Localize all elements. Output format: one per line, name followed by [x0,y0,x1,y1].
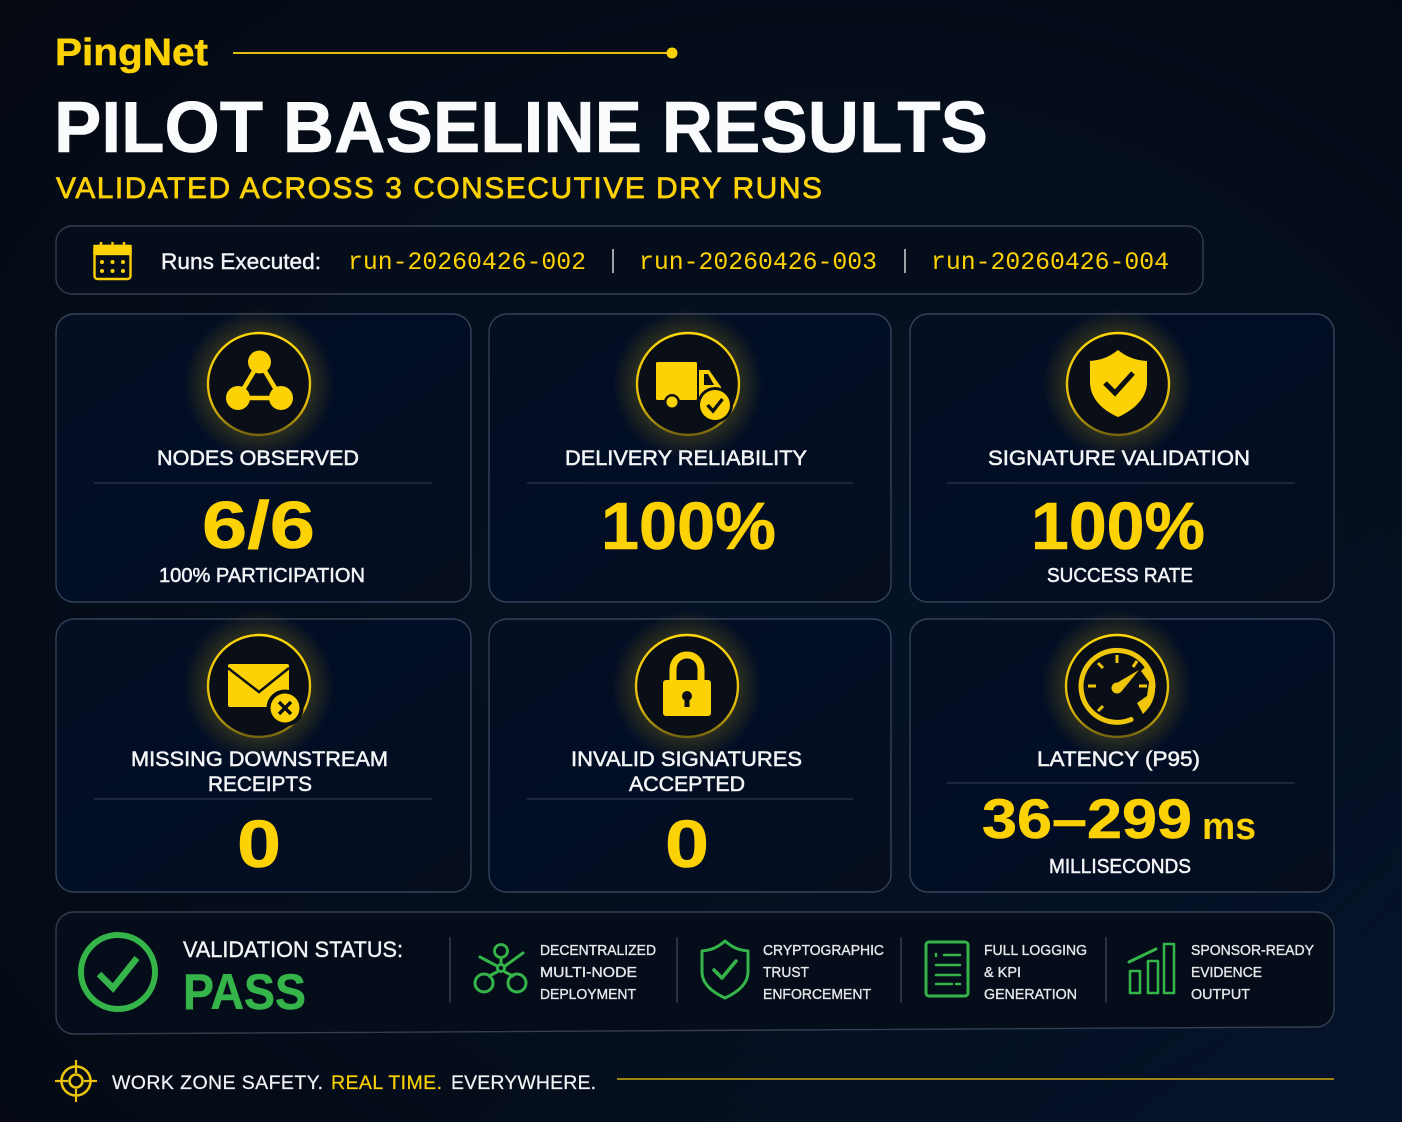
icon: truck with check [637,333,739,435]
value: 100% [1031,489,1205,564]
feature: cryptographic trust [702,941,884,1003]
feature: decentralized deployment: DEPLOYMENT [540,987,636,1003]
panel: validation status [56,912,1334,1034]
icon: pass check [81,935,155,1009]
feature: full logging: & KPI [984,965,1021,981]
caption: MILLISECONDS [1049,856,1191,878]
run identifiers [348,248,1169,277]
feature: sponsor-ready evidence: OUTPUT [1191,987,1250,1003]
feature: decentralized deployment: MULTI-NODE [540,965,637,981]
header: brand logo with line [55,32,678,74]
footer tagline: REAL TIME. [331,1072,442,1094]
panel: invalid signatures accepted [489,611,891,892]
label: INVALID SIGNATURES [571,747,802,771]
icon: target [55,1060,97,1102]
caption: 100% PARTICIPATION [159,565,365,587]
value: ms [1202,806,1256,848]
feature: decentralized deployment [475,943,656,1003]
feature: full logging [926,942,1087,1003]
footer tagline: EVERYWHERE. [451,1072,596,1094]
icon: shield check [702,941,748,998]
icon: shield with check [1067,333,1169,435]
panel: delivery reliability [489,309,891,602]
footer tagline [55,1060,1334,1102]
icon: document [926,942,968,996]
feature: cryptographic trust: ENFORCEMENT [763,987,871,1003]
icon: bar chart [1129,944,1174,993]
label: NODES OBSERVED [157,446,359,470]
icon: speedometer gauge [1066,635,1168,737]
feature: cryptographic trust: CRYPTOGRAPHIC [763,943,884,959]
footer tagline: WORK ZONE SAFETY. [112,1072,323,1094]
label [131,747,388,796]
subtitle: VALIDATED ACROSS 3 CONSECUTIVE DRY RUNS [56,172,822,205]
title: PILOT BASELINE RESULTS [54,88,988,168]
label: RECEIPTS [208,772,312,796]
label: LATENCY (P95) [1037,747,1200,771]
panel: nodes observed [56,309,471,602]
feature: full logging: GENERATION [984,987,1077,1003]
value: 0 [237,807,281,882]
value: 6/6 [202,488,315,563]
value: 100% [601,489,776,564]
caption: SUCCESS RATE [1047,565,1193,587]
label: SIGNATURE VALIDATION [988,446,1250,470]
status label: VALIDATION STATUS: [183,937,403,962]
header: brand logo with line: PingNet [55,32,208,74]
value: 0 [665,807,709,882]
value: 36–299 [982,787,1192,850]
icon: nodes [475,944,526,992]
feature: sponsor-ready evidence: EVIDENCE [1191,965,1262,981]
panel: signature validation [910,309,1334,602]
label: DELIVERY RELIABILITY [565,446,807,470]
run identifiers: run-20260426-004 [931,248,1169,277]
panel: runs executed [56,226,1203,294]
status value: PASS [183,964,306,1020]
icon: padlock [636,635,738,737]
feature: sponsor-ready evidence: SPONSOR-READY [1191,943,1314,959]
panel: missing downstream receipts [56,611,471,892]
feature: full logging: FULL LOGGING [984,943,1087,959]
icon: node triangle [208,333,310,435]
label: MISSING DOWNSTREAM [131,747,388,771]
run identifiers: run-20260426-003 [639,248,877,277]
label: ACCEPTED [629,772,745,796]
feature: decentralized deployment: DECENTRALIZED [540,943,656,959]
feature: sponsor-ready evidence [1129,943,1314,1003]
panel: latency [910,611,1334,892]
icon: envelope with x [208,635,310,737]
feature: cryptographic trust: TRUST [763,965,809,981]
runs label: Runs Executed: [161,249,321,274]
label [571,747,802,796]
value [982,787,1256,850]
run identifiers: run-20260426-002 [348,248,586,277]
icon: calendar [94,242,130,279]
